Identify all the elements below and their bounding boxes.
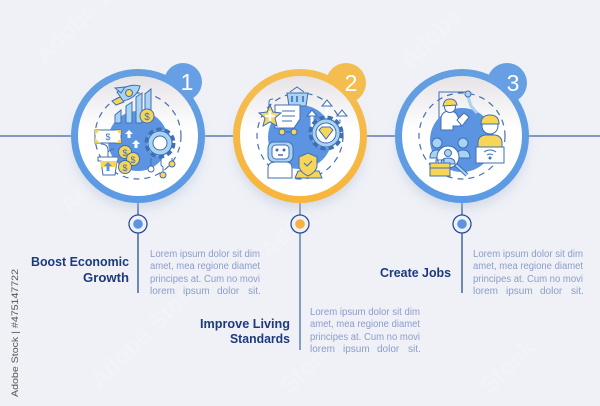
stacked coins: $	[130, 155, 136, 165]
text block 1	[150, 249, 261, 297]
text block 3: Lorem ipsum dolor sit dim	[473, 249, 583, 260]
badge 2: 2	[345, 70, 357, 96]
stock watermarks: Adobe Stock	[85, 271, 208, 394]
circuit nodes	[151, 158, 172, 172]
text block 3: sit.	[571, 286, 584, 297]
bars	[115, 89, 151, 123]
robot	[268, 142, 293, 178]
step 1: economic growth circle	[71, 63, 205, 208]
connector node 3	[453, 215, 471, 233]
text block 2: Lorem ipsum dolor sit dim	[310, 307, 420, 318]
badge 3	[487, 63, 527, 103]
heading: Create Jobs: Create Jobs	[380, 266, 451, 280]
stacked coins: $	[122, 163, 128, 173]
text block 3: ipsum	[506, 286, 533, 297]
connector node 2	[291, 215, 309, 233]
text block 3: principes at. Cum no movi	[473, 274, 583, 285]
badge 2	[326, 63, 366, 103]
list card	[269, 99, 300, 135]
banknote: $	[105, 132, 111, 142]
stock watermarks: Adobe	[395, 2, 467, 74]
stock watermarks: Adobe	[55, 147, 127, 219]
text block 3: amet, mea regione diamet	[473, 261, 583, 272]
arrows	[125, 130, 133, 138]
heading: Boost Economic Growth: Growth	[83, 271, 129, 285]
icon: workers and recruitment	[419, 91, 505, 179]
text block 1: sit.	[248, 286, 261, 297]
step 3: create jobs circle	[395, 63, 529, 208]
team members	[430, 138, 470, 158]
text block 1: Lorem ipsum dolor sit dim	[150, 249, 260, 260]
icon: growth, money and gear: $	[144, 112, 150, 123]
text block 2: principes at. Cum no movi	[310, 332, 420, 343]
text block 3: dolor	[540, 286, 563, 297]
text block 1: dolor	[217, 286, 240, 297]
text block 3	[473, 249, 584, 297]
stock watermarks: Stock	[475, 333, 541, 399]
text block 2: ipsum	[343, 344, 370, 355]
text block 2: sit.	[408, 344, 421, 355]
rocket	[112, 85, 140, 105]
vertical connector lines	[138, 200, 462, 350]
text block 1: amet, mea regione diamet	[150, 261, 260, 272]
engineer with clipboard	[441, 99, 469, 130]
basket	[287, 87, 308, 106]
horizontal timeline	[0, 135, 600, 137]
stock watermarks: Stock	[275, 333, 341, 399]
text block 2	[310, 307, 421, 355]
badge 1	[164, 63, 202, 101]
heading: Boost Economic Growth	[31, 255, 129, 285]
stock credit: Adobe Stock | #475147722	[10, 269, 21, 397]
heading: Improve Living Standards	[200, 317, 290, 346]
icon: growth, money and gear	[95, 85, 181, 179]
connector node 1	[129, 215, 147, 233]
heading: Improve Living Standards: Improve Living	[200, 317, 290, 331]
gear	[147, 130, 173, 156]
stacked coins	[118, 146, 140, 174]
text block 2: dolor	[377, 344, 400, 355]
heading: Boost Economic Growth: Boost Economic	[31, 255, 129, 269]
text block 1: lorem	[150, 286, 175, 297]
worker at laptop	[476, 115, 504, 163]
badge 1: 1	[181, 69, 193, 95]
stock watermarks: Adobe Stock	[255, 141, 378, 264]
stacked coins: $	[122, 148, 128, 158]
heading: Improve Living Standards: Standards	[230, 332, 290, 346]
text block 3: lorem	[473, 286, 498, 297]
plant pot	[98, 144, 118, 175]
magnifier	[437, 146, 467, 175]
badge 3: 3	[507, 70, 519, 96]
coin	[140, 109, 154, 123]
robot arm and frame	[439, 91, 477, 118]
text block 2: amet, mea regione diamet	[310, 319, 420, 330]
shield ribbon	[295, 153, 322, 178]
icon: robot, shopping and diamond gear	[257, 87, 347, 179]
step 2: living standards circle	[233, 63, 367, 208]
diamond gear	[307, 100, 347, 148]
toolbox	[430, 160, 450, 176]
text block 1: ipsum	[183, 286, 210, 297]
star	[259, 105, 281, 126]
text block 1: principes at. Cum no movi	[150, 274, 260, 285]
text block 2: lorem	[310, 344, 335, 355]
